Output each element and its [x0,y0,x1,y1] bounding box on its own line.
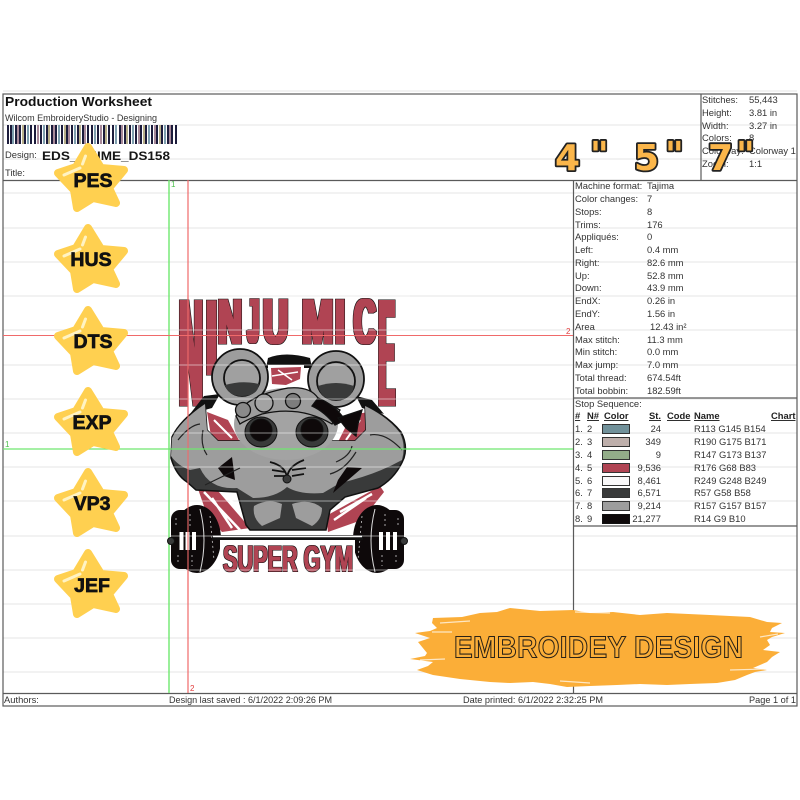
star: HUS [58,228,124,289]
stop sequence table: 4. [575,462,583,473]
stop sequence table [575,398,795,524]
stats: top right: Zoom: [702,158,729,169]
gray muscles [171,404,404,498]
machine details list: 176 [647,219,663,230]
stop sequence table: 9 [587,513,592,524]
machine details list: 82.6 mm [647,257,684,268]
black hood pieces behind head [190,354,384,414]
machine details list: Max stitch: [575,334,620,345]
machine details list: 43.9 mm [647,282,684,293]
machine details list: Color changes: [575,193,638,204]
title letters: NINJU MICE: J [248,285,258,357]
stop sequence table: 349 [645,436,661,447]
stop sequence table: 21,277 [632,513,661,524]
stop sequence table: 6 [587,475,592,486]
stats: top right: 1:1 [749,158,762,169]
stop sequence table: R190 G175 B171 [694,436,766,447]
machine details list: EndX: [575,295,601,306]
machine details list: Appliqués: [575,231,619,242]
forehead patch [268,365,304,389]
machine details list: 674.54ft [647,372,681,383]
header: title block: Title: [5,167,25,178]
stats: top right: Height: [702,107,732,118]
left weight plates [168,505,221,573]
star: EXP: EXP [72,412,112,434]
footer: Page 1 of 1 [749,694,796,705]
stop sequence table: 3. [575,449,583,460]
machine details list: 1.56 in [647,308,675,319]
machine details list: EndY: [575,308,600,319]
stop sequence table: Code [667,410,690,421]
star: PES [58,147,124,208]
stats: top right: Colors: [702,132,732,143]
machine details list: Tajima [647,180,675,191]
footer: Date printed: 6/1/2022 2:32:25 PM [463,694,603,705]
header: title block: Production Worksheet [5,94,153,109]
stop sequence table: 1. [575,423,583,434]
machine details list: 52.8 mm [647,270,684,281]
stop sequence table: 4 [587,449,592,460]
right weight plates [353,505,408,573]
star: JEF: JEF [74,575,110,597]
size labels: " [665,135,684,176]
title letters: NINJU MICE: E [379,268,394,440]
star: DTS [58,310,124,371]
machine details list: 0.26 in [647,295,675,306]
banner text: EMBROIDEY DESIGN [454,632,743,665]
abdomen [254,460,322,526]
head [234,388,338,460]
header: title block: Wilcom EmbroideryStudio - Designing [5,112,157,123]
barcode [8,125,176,144]
stats: top right: Stitches: [702,94,738,105]
size labels: 4 [555,138,580,179]
machine details list: 7.0 mm [647,359,678,370]
stop sequence table: 5. [575,475,583,486]
arm and chest shadow silhouette [171,403,405,530]
stats: top right: 55,443 [749,94,778,105]
machine details list: Total thread: [575,372,627,383]
title letters: NINJU MICE: N [218,285,242,358]
headband with gems [236,388,362,436]
stop sequence table: St. [649,410,661,421]
star: PES: PES [73,170,113,192]
star: VP3: VP3 [74,493,111,515]
machine details list: Total bobbin: [575,385,628,396]
shadow under pecs [218,457,362,493]
stop sequence table: 7. [575,500,583,511]
stop sequence table: 2. [575,436,583,447]
header: title block: EDS_ANIME_DS158 [42,149,170,163]
alignment guides: 1 [5,440,10,449]
format stars [58,147,124,614]
stats: top right: 3.27 in [749,120,777,131]
size labels: " [590,135,609,176]
stop sequence table: R113 G145 B154 [694,423,766,434]
caption: SUPER GYM: SUPER GYM [223,538,353,580]
fists and arm lines [178,424,402,485]
machine details list: Machine format: [575,180,642,191]
footer [4,694,796,705]
stop sequence table: # [575,410,581,421]
machine details list: Min stitch: [575,346,617,357]
stats: top right: Width: [702,120,729,131]
worksheet frame [3,94,797,706]
title letters: NINJU MICE [179,266,394,440]
machine details list: Up: [575,270,590,281]
title letters: NINJU MICE: I [206,277,217,399]
embroidery design: ninja mouse gym mascot [168,266,410,600]
stop sequence table: Stop Sequence: [575,398,642,409]
stop sequence table: 9,214 [638,500,661,511]
alignment guides: 2 [190,684,195,693]
title letters: NINJU MICE: N [179,266,203,439]
machine details list: 182.59ft [647,385,681,396]
stop sequence table: 5 [587,462,592,473]
stop sequence table: 3 [587,436,592,447]
machine details list: 11.3 mm [647,334,683,345]
stop sequence table: 8. [575,513,583,524]
stop sequence table: 6,571 [638,487,661,498]
stop sequence table: Name [694,410,720,421]
machine details list: Trims: [575,219,601,230]
star: EXP [58,391,124,452]
machine details list: Area [575,321,596,332]
machine details list: Left: [575,244,593,255]
barbell and caption panel [212,535,363,574]
eyes [245,417,328,447]
sheet rules over the design [170,296,410,570]
stop sequence table: 6. [575,487,583,498]
stop sequence table: 7 [587,487,592,498]
stop sequence table: R147 G173 B137 [694,449,766,460]
star: JEF [58,553,124,614]
stop sequence table: 24 [651,423,661,434]
stats: top right: 8 [749,132,754,143]
right ear [308,351,364,407]
stop sequence table: R57 G58 B58 [694,487,751,498]
alignment guides: 2 [566,327,571,336]
star: DTS: DTS [74,331,112,353]
header: title block: Design: [5,149,37,160]
stats: top right: 3.81 in [749,107,777,118]
title letters: NINJU MICE: C [354,285,376,358]
size labels [555,135,755,179]
star: VP3 [58,472,124,533]
size labels: " [736,135,755,176]
machine details list: 0 [647,231,652,242]
stop sequence table: R157 G157 B157 [694,500,766,511]
machine details list: Right: [575,257,600,268]
size labels: 5 [634,138,659,179]
footer: Authors: [4,694,39,705]
red splatter around the arms [197,412,384,532]
stop sequence table: 2 [587,423,592,434]
alignment guides [3,180,573,693]
stop sequence table: 8 [587,500,592,511]
stats: top right [702,94,796,169]
title letters: NINJU MICE: I [335,287,345,359]
footer: Design last saved : 6/1/2022 2:09:26 PM [169,694,332,705]
stop sequence table: 9 [656,449,661,460]
star: HUS: HUS [70,249,112,271]
size labels: 7 [708,138,733,179]
stop sequence table: 9,536 [638,462,661,473]
alignment guides: 1 [171,180,176,189]
title letters: NINJU MICE: U [263,286,288,359]
brush banner [410,608,785,687]
machine details list: 8 [647,206,652,217]
stop sequence table: R249 G248 B249 [694,475,766,486]
stop sequence table: Color [604,410,629,421]
machine details list: Stops: [575,206,602,217]
stop sequence table: R176 G68 B83 [694,462,756,473]
machine details list: Max jump: [575,359,618,370]
stop sequence table: N# [587,410,600,421]
header: title block [5,94,170,178]
machine details list [575,180,686,396]
stats: top right: Colorway: [702,145,744,156]
machine details list: 7 [647,193,652,204]
machine details list: 12.43 in² [650,321,686,332]
left ear [212,349,268,405]
stop sequence table: Chart [771,410,795,421]
machine details list: 0.4 mm [647,244,678,255]
title letters: NINJU MICE: M [302,286,333,359]
machine details list: 0.0 mm [647,346,678,357]
stats: top right: Colorway 1 [749,145,796,156]
machine details list: Down: [575,282,602,293]
stop sequence table: R14 G9 B10 [694,513,746,524]
stop sequence table: 8,461 [638,475,661,486]
